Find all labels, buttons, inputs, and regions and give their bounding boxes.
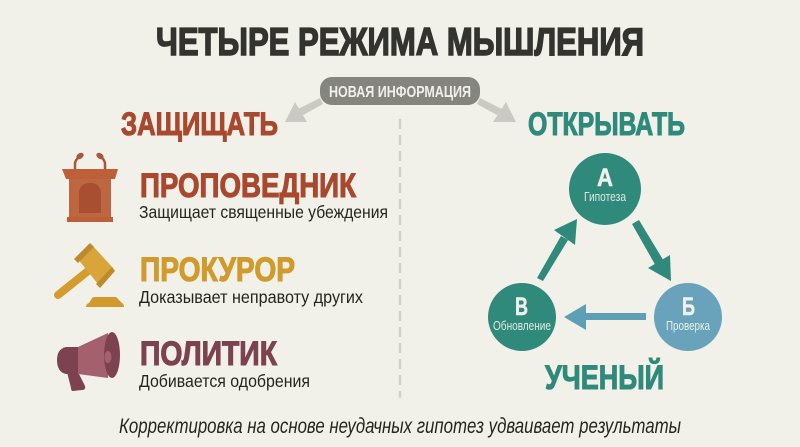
arrow: new information to defend [285, 98, 323, 122]
heading: defend: ЗАЩИЩАТЬ [121, 106, 278, 142]
icon: gavel [58, 243, 124, 307]
item: politician: ПОЛИТИК [140, 335, 277, 373]
item: prosecutor [139, 251, 363, 307]
icon: lectern [62, 151, 118, 222]
node: C update: В [515, 293, 528, 321]
arrow: update to hypothesis [537, 219, 577, 281]
node: C update [488, 283, 556, 351]
node: B test: Б [682, 293, 695, 321]
node: B test [654, 283, 722, 351]
node: C update: Обновление [493, 319, 551, 333]
title: ЧЕТЫРЕ РЕЖИМА МЫШЛЕНИЯ [156, 21, 644, 64]
arrow: test to update [564, 304, 646, 330]
label: scientist: УЧЕНЫЙ [545, 358, 664, 397]
node: A hypothesis: А [597, 164, 613, 192]
item: prosecutor: Доказывает неправоту других [139, 287, 363, 307]
item: preacher [139, 167, 388, 222]
heading: discover: ОТКРЫВАТЬ [528, 106, 685, 142]
pill: new information [320, 77, 480, 105]
item: prosecutor: ПРОКУРОР [140, 251, 295, 289]
node: B test: Проверка [666, 319, 710, 333]
icon: megaphone [57, 332, 120, 391]
pill: new information: НОВАЯ ИНФОРМАЦИЯ [329, 84, 471, 101]
item: politician [139, 335, 310, 391]
node: A hypothesis: Гипотеза [584, 190, 626, 204]
arrow: new information to discover [477, 98, 516, 122]
arrow: hypothesis to test [632, 220, 671, 281]
item: politician: Добивается одобрения [139, 371, 310, 391]
footer note: Корректировка на основе неудачных гипотез удваивает результаты [119, 415, 681, 438]
item: preacher: ПРОПОВЕДНИК [140, 167, 356, 205]
node: A hypothesis [569, 153, 641, 225]
item: preacher: Защищает священные убеждения [139, 202, 388, 222]
